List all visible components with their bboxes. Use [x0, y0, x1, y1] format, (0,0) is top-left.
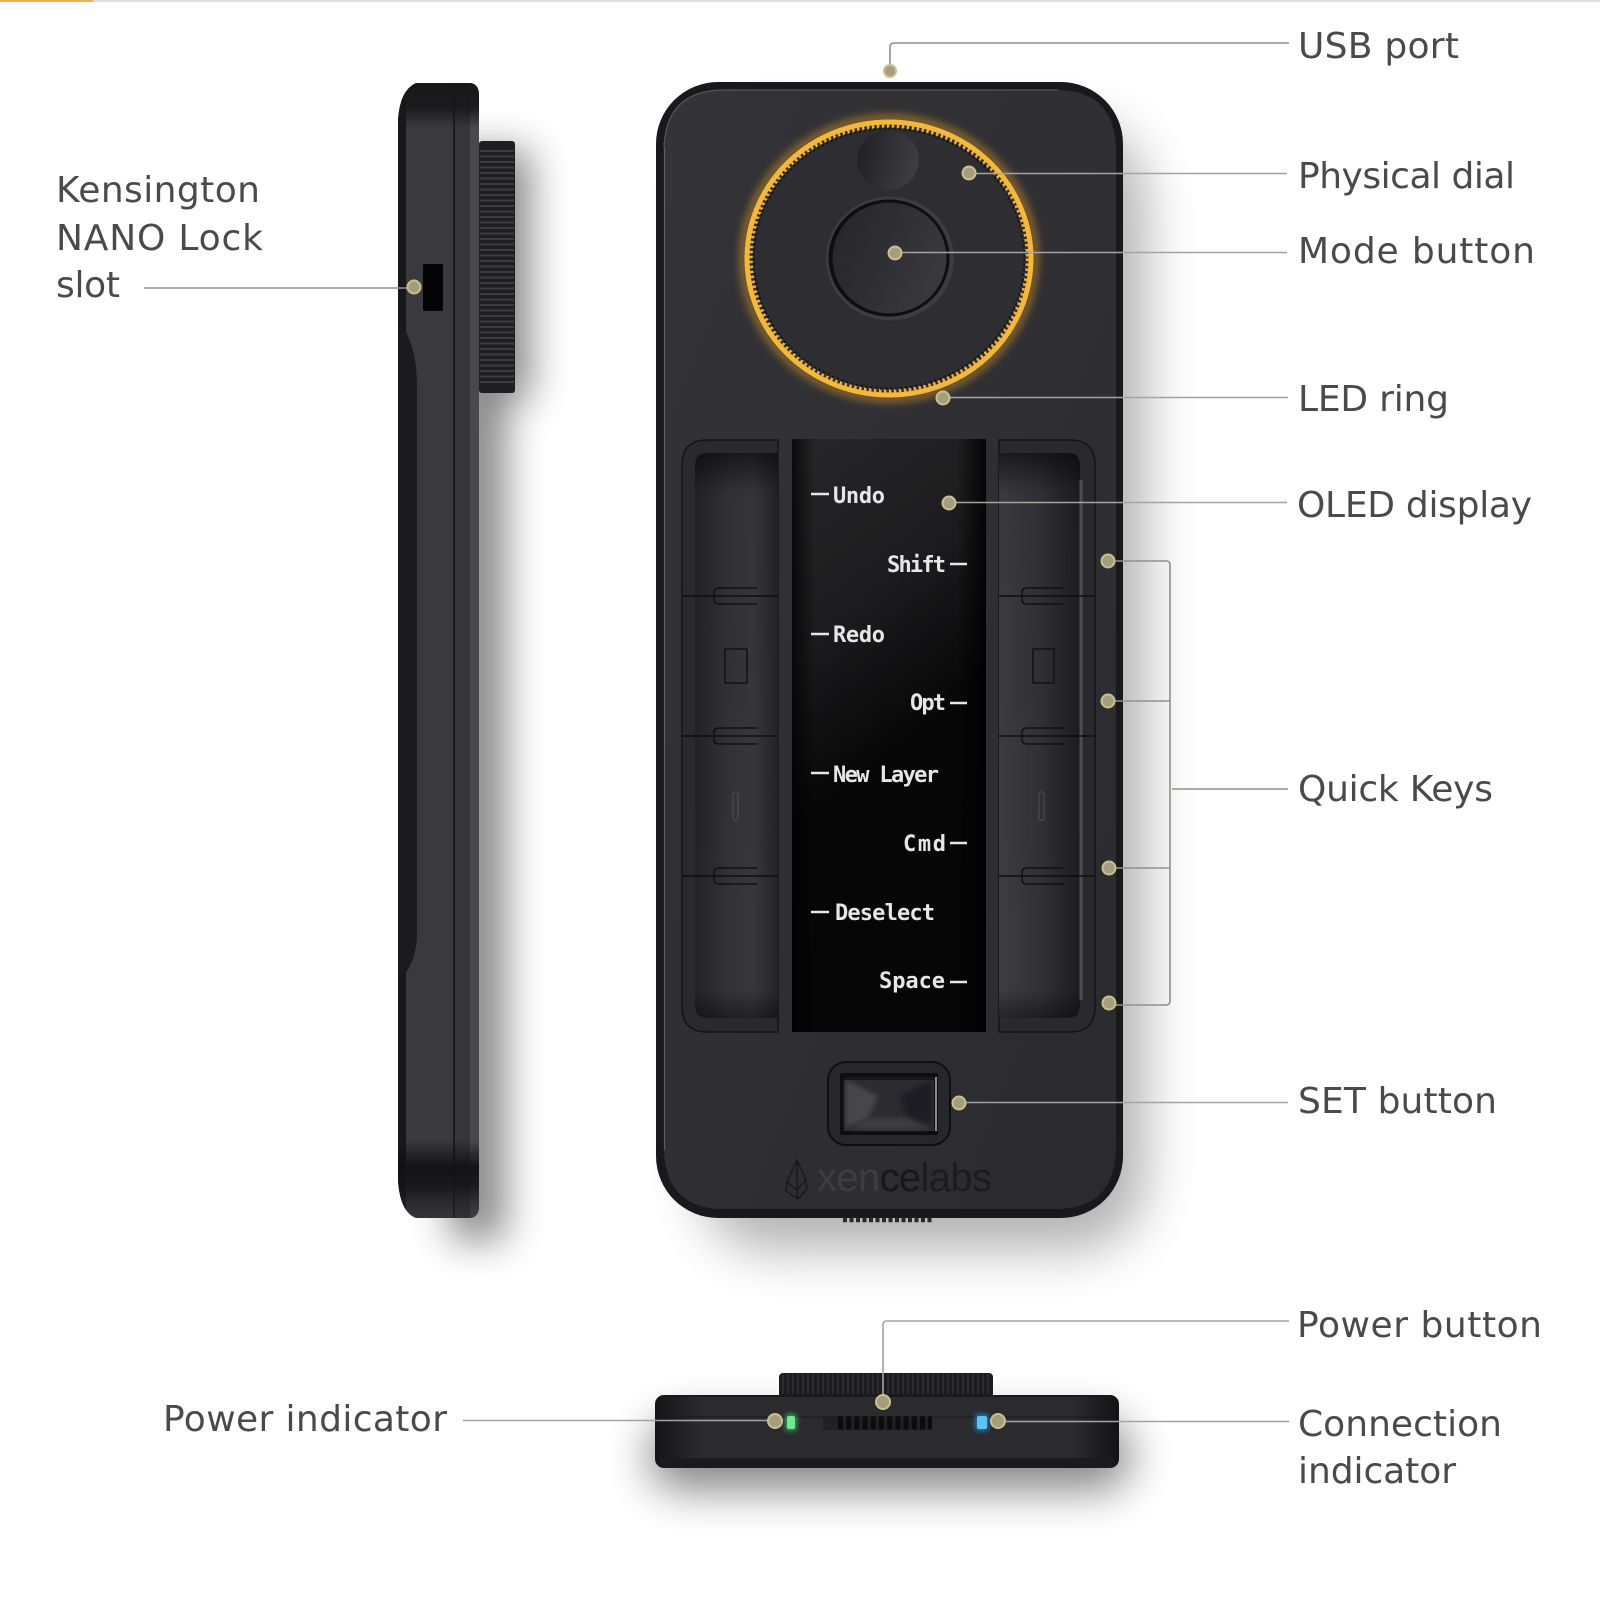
side view shadow	[450, 150, 530, 1240]
xencelabs logo	[786, 1156, 992, 1200]
callout: Mode button: Mode button	[1298, 231, 1535, 272]
callout: Connection indicator: Connection	[1298, 1404, 1502, 1445]
connection LED blue	[975, 1414, 989, 1431]
callout: Power button: Power button	[1297, 1305, 1542, 1346]
callout: LED ring: LED ring	[1298, 379, 1449, 420]
bottom view body	[655, 1395, 1119, 1468]
bottom view shadow	[650, 1420, 1130, 1490]
bottom edge teeth	[843, 1218, 932, 1222]
OLED key labels	[811, 484, 967, 994]
callout: Quick Keys bracket	[1102, 554, 1493, 1010]
callout: Mode button	[888, 231, 1535, 272]
callout: USB port	[884, 26, 1459, 77]
OLED display	[792, 439, 986, 1032]
front view of device	[656, 82, 1145, 1250]
callout: Power indicator: Power indicator	[163, 1399, 447, 1440]
callout: Kensington NANO Lock slot	[56, 170, 420, 306]
callout: Kensington NANO Lock slot: NANO Lock	[56, 218, 263, 259]
callout: Connection indicator: indicator	[1298, 1451, 1456, 1492]
OLED key labels: Deselect	[835, 901, 935, 926]
mode button	[826, 196, 954, 320]
OLED key labels: Shift	[887, 553, 946, 578]
callout: Physical dial	[962, 156, 1515, 197]
left quick keys	[682, 440, 778, 1032]
callout: Kensington NANO Lock slot: Kensington	[56, 170, 260, 211]
power LED green	[785, 1414, 797, 1431]
callout: Kensington NANO Lock slot: slot	[56, 265, 120, 306]
callout: Physical dial: Physical dial	[1298, 156, 1515, 197]
callout: OLED display	[942, 485, 1532, 526]
physical dial with LED ring	[743, 118, 1035, 399]
right quick keys	[999, 440, 1095, 1032]
SET button	[828, 1062, 950, 1145]
callout: Power indicator	[163, 1399, 782, 1440]
logo wordmark: xencelabs	[817, 1156, 992, 1200]
device body	[656, 82, 1123, 1218]
bottom vent	[823, 1416, 932, 1430]
front shadow	[700, 125, 1145, 1250]
callout: Power button	[876, 1305, 1542, 1409]
bottom view dial	[779, 1373, 993, 1399]
callout: USB port: USB port	[1298, 26, 1459, 67]
OLED key labels: Space	[879, 969, 945, 994]
top progress bar	[0, 0, 1600, 2]
callout: LED ring	[936, 379, 1449, 420]
callout: SET button	[952, 1081, 1497, 1122]
callout: OLED display: OLED display	[1297, 485, 1532, 526]
OLED key labels: New Layer	[833, 763, 939, 788]
OLED key labels: Opt	[910, 691, 946, 716]
device face	[664, 90, 1116, 1209]
Kensington lock slot	[423, 264, 443, 311]
OLED key labels: Undo	[833, 484, 885, 509]
OLED key labels: Redo	[833, 623, 885, 648]
callout: Quick Keys bracket: Quick Keys	[1298, 769, 1493, 810]
OLED key labels: Cmd	[903, 832, 946, 857]
logo mark	[786, 1160, 807, 1199]
side view of device	[397, 83, 530, 1240]
callout: SET button: SET button	[1298, 1081, 1497, 1122]
bottom view of device	[650, 1373, 1130, 1490]
callout: Connection indicator	[991, 1404, 1502, 1492]
dial finger dimple	[857, 130, 919, 190]
side dial knurl	[479, 141, 515, 393]
side body	[397, 83, 479, 1218]
